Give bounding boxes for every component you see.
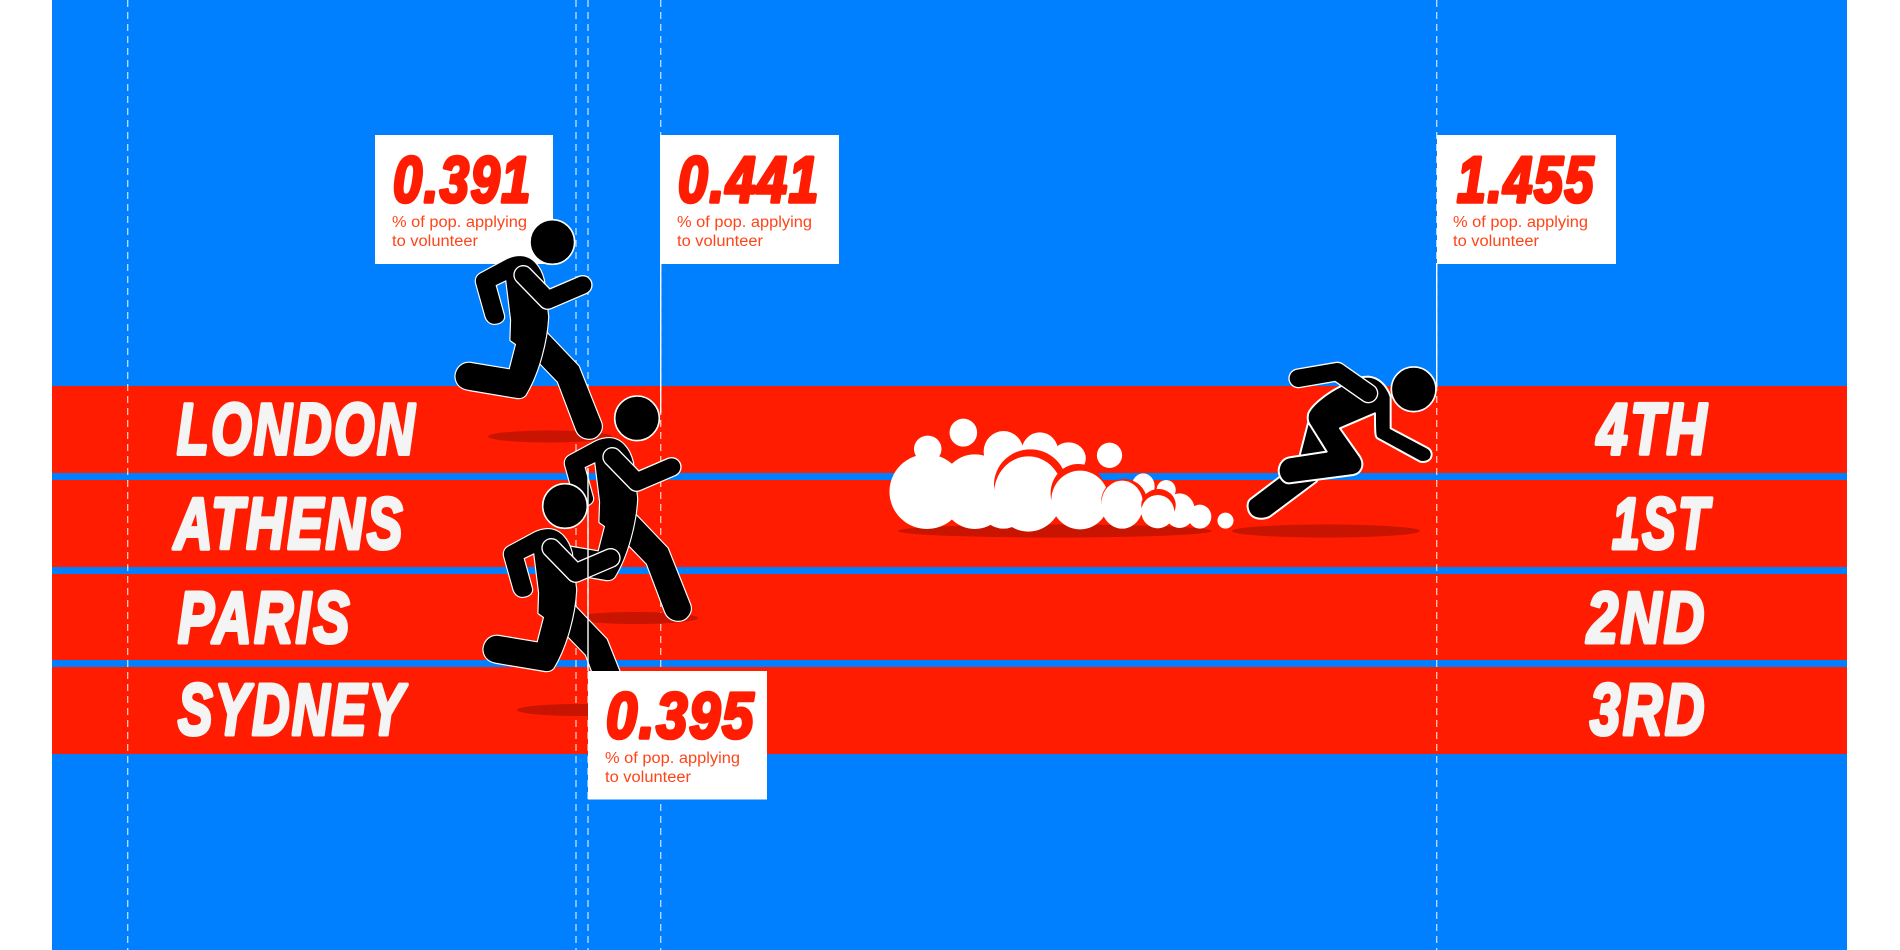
card: Athens value: 0.441 — [678, 144, 820, 216]
card: Paris value — [1437, 135, 1616, 264]
shadows under runners and dust — [488, 430, 1420, 716]
card: London value: 0.391 — [393, 144, 532, 216]
card: Sydney value: 0.395 — [606, 680, 755, 752]
card: Athens value: % of pop. applying — [677, 214, 812, 231]
label: Sydney: SYDNEY — [178, 670, 408, 750]
card: Paris value: to volunteer — [1453, 233, 1539, 250]
card: Sydney value — [588, 671, 767, 800]
card: Sydney value: to volunteer — [605, 769, 691, 786]
panel: race track lanes — [52, 386, 1847, 754]
label: Paris: PARIS — [178, 578, 352, 658]
card: Athens value: to volunteer — [677, 233, 763, 250]
card: London value: % of pop. applying — [392, 214, 527, 231]
card: Sydney value: % of pop. applying — [605, 750, 740, 767]
label: Athens: ATHENS — [173, 484, 405, 564]
icon: Paris sprinter — [1248, 367, 1436, 519]
card: Paris value: 1.455 — [1457, 144, 1595, 216]
card: London value — [375, 135, 553, 264]
rank: Athens 1st: 1ST — [1612, 484, 1713, 564]
card: Athens value — [660, 135, 839, 264]
icon: London runner — [456, 220, 601, 438]
card: London value: to volunteer — [392, 233, 478, 250]
icon: Athens runner — [545, 396, 690, 620]
card: Paris value: % of pop. applying — [1453, 214, 1588, 231]
icon: dust cloud — [889, 419, 1234, 532]
rank: Sydney 3rd: 3RD — [1590, 670, 1707, 750]
icon: Sydney runner — [484, 484, 629, 711]
rank: Paris 2nd: 2ND — [1585, 578, 1707, 658]
label: London: LONDON — [177, 390, 417, 470]
rank: London 4th: 4TH — [1595, 390, 1709, 470]
